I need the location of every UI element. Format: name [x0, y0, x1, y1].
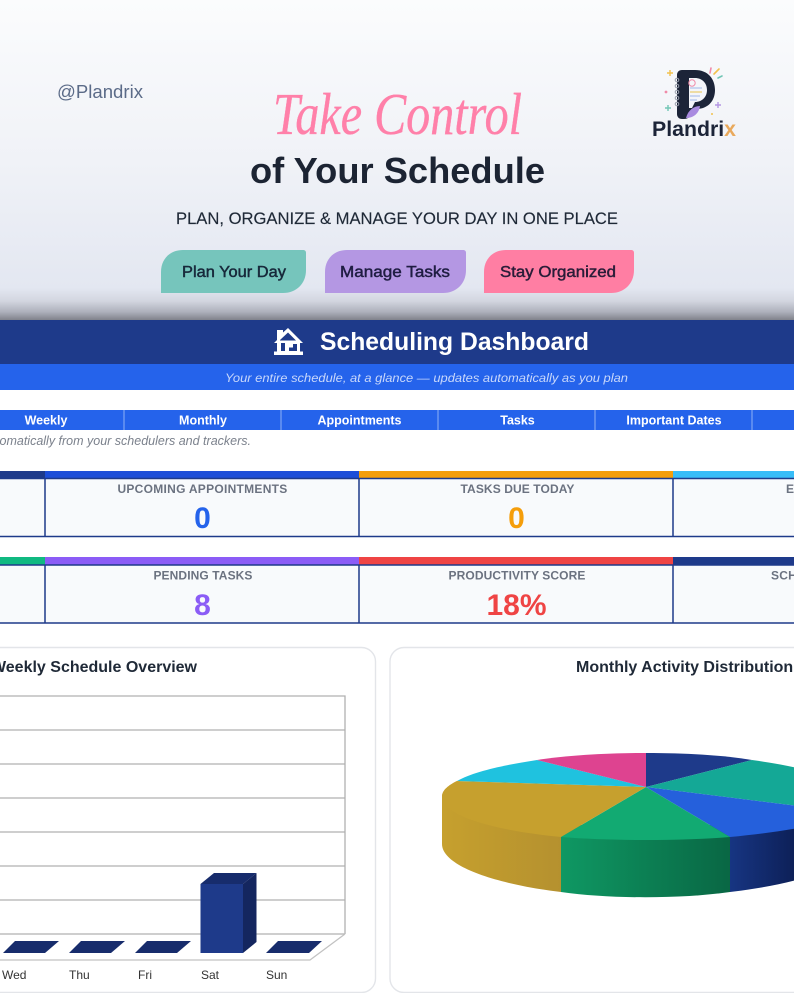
title: Take Control: Take Control [273, 81, 522, 147]
icon: notebook letter P [665, 68, 722, 119]
bar: Sat [200, 873, 256, 953]
tab labels: Important Dates [626, 414, 722, 428]
axis labels: Thu [69, 968, 90, 982]
pie slice: cyan [457, 760, 646, 787]
icon: house [274, 328, 303, 355]
axis labels: Fri [138, 968, 152, 982]
KPI: productivity score: PRODUCTIVITY SCORE [449, 568, 585, 582]
pie slice: navy [646, 753, 752, 787]
bar: Wed [3, 941, 59, 953]
pie slice: blue [646, 787, 794, 837]
pie slice: teal [646, 760, 794, 812]
dashboard header bar [0, 320, 794, 364]
tab labels: Appointments [317, 414, 402, 428]
KPI: upcoming appointments: UPCOMING APPOINTMENTS [117, 482, 288, 496]
panel: weekly schedule overview [0, 648, 376, 992]
3D bar chart [0, 696, 345, 982]
pill: Plan Your Day: Plan Your Day [182, 264, 286, 281]
KPI row 2 [0, 557, 794, 623]
KPI: clipped label: E [786, 482, 794, 496]
KPI: tasks due today: TASKS DUE TODAY [461, 482, 574, 496]
panel: monthly activity distribution [390, 648, 794, 992]
KPI: tasks due today [461, 482, 574, 535]
logo: Plandrix [652, 68, 736, 141]
bar: Fri [135, 941, 191, 953]
dashboard title: Scheduling Dashboard [320, 328, 589, 356]
tagline: PLAN, ORGANIZE & MANAGE YOUR DAY IN ONE PLACE [176, 209, 618, 228]
axis labels: Sun [266, 968, 287, 982]
pie slice: pink [537, 753, 646, 787]
KPI: pending tasks: PENDING TASKS [153, 568, 253, 582]
pill: Manage Tasks: Manage Tasks [340, 264, 450, 281]
KPI row 1 [0, 471, 794, 537]
dashboard subtitle bar: Your entire schedule, at a glance — updates automatically as you plan [225, 371, 628, 385]
tab labels [25, 414, 722, 428]
tab labels: Monthly [179, 414, 227, 428]
tab labels: Tasks [500, 414, 535, 428]
bar: Sun [266, 941, 322, 953]
pill: Manage Tasks [325, 250, 466, 293]
pie slice: gold [442, 781, 646, 837]
KPI: productivity score [449, 568, 585, 622]
tab labels: Weekly [25, 414, 67, 428]
axis labels [2, 968, 287, 982]
pie side walls [442, 781, 562, 892]
KPI: tasks due today: 0 [508, 502, 525, 535]
KPI: pending tasks [153, 568, 253, 622]
pill: Stay Organized: Stay Organized [500, 264, 616, 281]
title: of Your Schedule: of Your Schedule [250, 150, 545, 191]
KPI: upcoming appointments: 0 [194, 502, 211, 535]
pill: Stay Organized [484, 250, 634, 293]
hero background [0, 0, 794, 320]
KPI: upcoming appointments [117, 482, 288, 535]
dashboard subtitle bar [0, 364, 794, 390]
axis labels: Wed [2, 968, 26, 982]
bar: Thu [69, 941, 125, 953]
axis labels: Sat [201, 968, 220, 982]
chart heading: Monthly Activity Distribution [576, 659, 793, 676]
KPI: productivity score: 18% [486, 589, 547, 622]
logo wordmark: Plandrix [652, 118, 736, 141]
KPI: pending tasks: 8 [194, 589, 211, 622]
pill: Plan Your Day [161, 250, 306, 293]
social handle: @Plandrix [57, 82, 143, 102]
pie slice: green [561, 787, 730, 840]
3D pie chart [442, 753, 794, 897]
navigation tabs [0, 410, 794, 430]
